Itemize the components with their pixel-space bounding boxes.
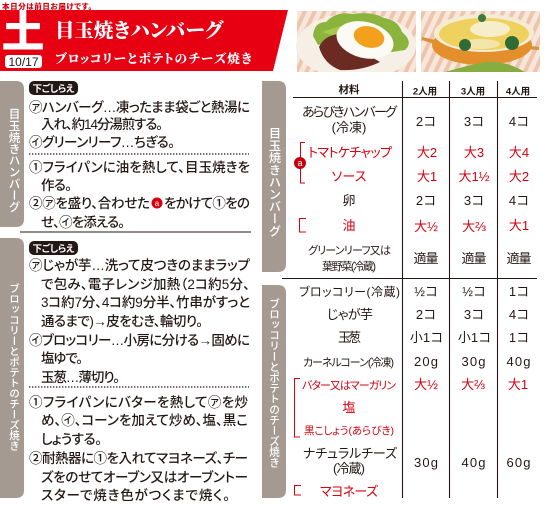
- ingredient rows: ナチュラルチーズ: [303, 446, 398, 461]
- ingredient rows: 1コ: [509, 330, 529, 345]
- ingredient rows: 大4: [509, 145, 529, 160]
- ingredient rows: じゃが芋: [327, 307, 373, 322]
- subtitle: ブロッコリーとポテトのチーズ焼き: [55, 51, 252, 66]
- ingredient rows: ブロッコリー(冷蔵): [299, 284, 400, 299]
- ingredient rows: 40g: [462, 455, 486, 470]
- ingredient rows: トマトケチャップ: [308, 145, 392, 160]
- ingredient rows: 2コ: [416, 114, 436, 129]
- table header: 3人用: [461, 86, 485, 98]
- ingredient rows: 大1: [509, 218, 529, 233]
- ingredient rows: 大3: [464, 145, 484, 160]
- ingredient rows: 大⅔: [462, 219, 486, 234]
- ingredient rows: 40g: [506, 354, 530, 369]
- ingredient rows: 4コ: [509, 114, 529, 129]
- ingredient rows: 大⅔: [461, 377, 485, 392]
- text block: broccoli steps: 玉葱…薄切り。: [41, 370, 120, 385]
- table header: 材料: [338, 83, 360, 96]
- ingredient rows: 30g: [414, 455, 438, 470]
- ingredient rows: 小1コ: [410, 330, 443, 345]
- text block: broccoli steps: め、㋑、コーンを加えて炒め、塩、黒こ: [41, 413, 248, 428]
- ingredient rows: 大1: [508, 377, 528, 392]
- ingredient rows: バター又はマーガリン: [302, 379, 397, 392]
- ingredient rows: 1コ: [509, 284, 529, 299]
- panel: broccoli ingredients side tab: ブロッコリーとポテトのチーズ焼き: [268, 297, 280, 468]
- ingredient rows: 小1コ: [458, 330, 491, 345]
- ingredient rows: ½コ: [414, 284, 438, 299]
- ingredient rows: 適量: [462, 251, 486, 266]
- text block: broccoli steps: 3コ約7分、4コ約9分半、竹串がすっと: [41, 294, 250, 310]
- text block: broccoli steps: [29, 257, 251, 503]
- header banner: [0, 9, 288, 71]
- panel: hamburger prep side tab: 目玉焼きハンバーグ: [8, 108, 20, 212]
- prep label: [29, 81, 78, 95]
- text block: hamburger steps: 作る。: [41, 178, 72, 193]
- ingredient rows: 3コ: [464, 307, 484, 322]
- text block: hamburger steps: ①フライパンに油を熱して、目玉焼きを: [29, 160, 250, 175]
- prep label: [29, 241, 78, 255]
- ingredient rows: ソース: [332, 169, 366, 184]
- ingredient rows: 適量: [506, 251, 532, 266]
- text block: broccoli steps: ①フライパンにバターを熱して㋐を炒: [29, 395, 248, 410]
- ingredient rows: 大2: [509, 169, 529, 184]
- ingredient rows: 4コ: [509, 193, 529, 208]
- day of week: 土: [2, 9, 44, 57]
- date badge: 10/17: [8, 55, 39, 69]
- ingredient rows: あらびきハンバーグ: [302, 104, 398, 120]
- text block: hamburger steps: をかけて①をの: [164, 196, 250, 211]
- table header: 4人用: [506, 86, 530, 98]
- text block: hamburger steps: せ、㋑を添える。: [41, 215, 125, 230]
- text block: hamburger steps: ㋑グリーンリーフ…ちぎる。: [29, 134, 175, 150]
- ingredient rows: 3コ: [464, 193, 484, 208]
- photo: gratin: [421, 11, 540, 72]
- ingredient rows: 60g: [506, 455, 530, 470]
- ingredient rows: グリーンリーフ又は: [308, 243, 391, 257]
- text block: broccoli steps: ㋐じゃが芋…洗って皮つきのままラップ: [29, 257, 251, 273]
- icon: a badge: [152, 198, 162, 208]
- table header: [338, 83, 530, 98]
- ingredient rows: 2コ: [416, 193, 436, 208]
- ingredient rows: 4コ: [509, 307, 529, 322]
- text block: broccoli steps: しょうする。: [41, 432, 102, 447]
- photo: hamburger: [296, 0, 416, 82]
- panel: hamburger ingredients side tab: 目玉焼きハンバーグ: [267, 127, 281, 237]
- ingredient rows: 玉葱: [338, 330, 361, 345]
- panel: hamburger prep side tab: [0, 81, 24, 227]
- table header: 2人用: [413, 86, 437, 98]
- panel: broccoli prep side tab: ブロッコリーとポテトのチーズ焼き: [8, 282, 20, 451]
- ingredient rows: 大1½: [458, 169, 490, 184]
- panel: broccoli ingredients side tab: [262, 285, 286, 498]
- ingredients table: [282, 81, 537, 499]
- ingredient rows: (冷凍): [332, 120, 366, 135]
- ingredient rows: 2コ: [416, 307, 436, 322]
- ingredient rows: ½コ: [462, 284, 486, 299]
- ingredient rows: 黒こしょう(あらびき): [304, 425, 394, 437]
- ingredient rows: 30g: [462, 354, 486, 369]
- text block: hamburger steps: 入れ、約14分湯煎する。: [41, 116, 163, 132]
- panel: broccoli prep side tab: [0, 238, 24, 498]
- icon: a badge: a: [155, 199, 160, 208]
- text block: hamburger steps: ②㋐を盛り、合わせた: [29, 196, 150, 211]
- icon: a badge: [294, 157, 306, 169]
- text block: broccoli steps: ②耐熱器に①を入れてマヨネーズ、チー: [29, 450, 248, 466]
- text block: broccoli steps: 通るまで)→皮をむき、輪切り。: [41, 314, 203, 329]
- panel: hamburger ingredients side tab: [262, 81, 286, 272]
- main title: 目玉焼きハンバーグ: [55, 19, 224, 42]
- ingredient rows: 大½: [414, 377, 438, 392]
- brackets: [294, 142, 306, 495]
- prep label: 下ごしらえ: [32, 243, 74, 255]
- text block: broccoli steps: ㋑ブロッコリー…小房に分ける→固めに: [29, 332, 250, 348]
- text block: broccoli steps: スターで焼き色がつくまで焼く。: [41, 487, 230, 503]
- delivery note: 本日分は前日お届けです。: [2, 1, 92, 11]
- ingredient rows: 油: [342, 218, 356, 233]
- ingredient rows: 大1: [417, 169, 437, 184]
- ingredient rows: [299, 104, 532, 499]
- ingredient rows: 3コ: [464, 114, 484, 129]
- text block: broccoli steps: ズをのせてオーブン又はオーブントー: [41, 469, 248, 485]
- ingredient rows: 塩: [342, 400, 356, 415]
- text block: hamburger steps: [29, 99, 250, 230]
- ingredient rows: マヨネーズ: [320, 484, 379, 499]
- ingredient rows: (冷蔵): [333, 461, 365, 476]
- icon: a badge: a: [297, 158, 303, 168]
- ingredient rows: カーネルコーン(冷凍): [303, 356, 394, 369]
- ingredient rows: 葉野菜(冷蔵): [322, 259, 376, 273]
- ingredient rows: 20g: [414, 354, 438, 369]
- prep label: 下ごしらえ: [32, 83, 74, 95]
- text block: broccoli steps: 塩ゆで。: [41, 351, 83, 366]
- text block: broccoli steps: で包み、電子レンジ加熱（2コ約5分、: [41, 276, 250, 292]
- ingredient rows: 大2: [417, 145, 437, 160]
- ingredient rows: 大½: [414, 219, 438, 234]
- text block: hamburger steps: ㋐ハンバーグ…凍ったまま袋ごと熱湯に: [29, 99, 250, 115]
- ingredient rows: 卵: [342, 193, 356, 208]
- ingredient rows: 適量: [414, 251, 438, 266]
